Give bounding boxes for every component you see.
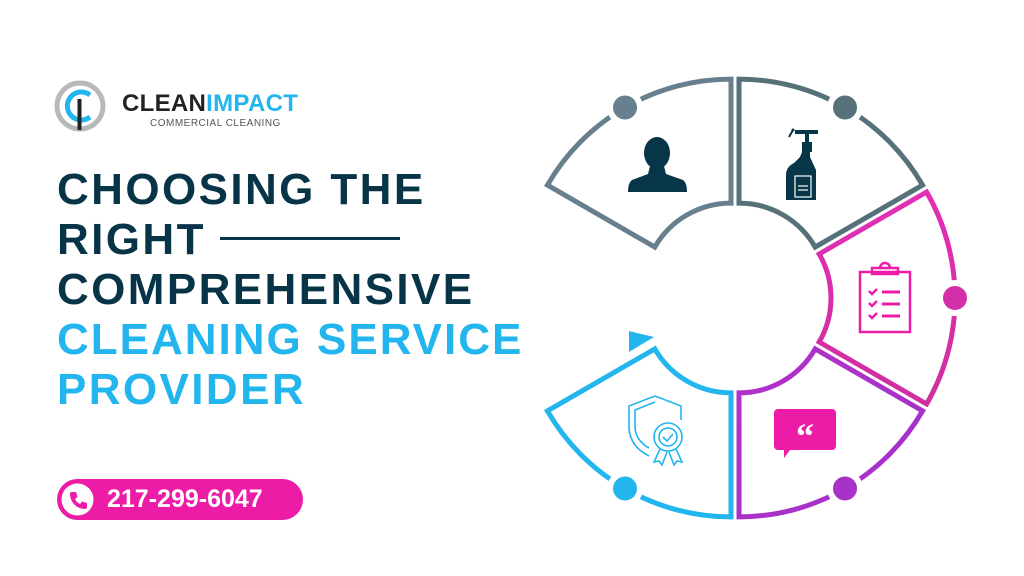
title (57, 165, 523, 414)
logo tagline: COMMERCIAL CLEANING (150, 118, 281, 129)
logo (54, 80, 298, 132)
arrow: blue triangle (629, 331, 654, 352)
title: CLEANING SERVICE (57, 315, 523, 364)
icon: quote bubble: “ (796, 416, 814, 456)
icon: phone (62, 484, 94, 516)
title: COMPREHENSIVE (57, 265, 474, 314)
icon: person (628, 137, 687, 192)
title: PROVIDER (57, 365, 306, 414)
segment: right (checklist) (819, 192, 970, 404)
segment: bottom-left (certificate shield) (547, 349, 731, 517)
title: RIGHT (57, 215, 206, 264)
segment: bottom-right (quote) (739, 349, 923, 517)
icon: clipboard (860, 263, 910, 332)
icon: shield badge (629, 396, 682, 465)
icon: quote bubble (774, 409, 836, 458)
segment: top-left (person) (547, 79, 731, 247)
segment: top-right (spray bottle) (739, 79, 923, 247)
title: CHOOSING THE (57, 165, 426, 214)
icon: spray bottle (786, 128, 818, 200)
phone pill (57, 479, 303, 520)
logo wordmark: CLEANIMPACT (122, 90, 298, 117)
icon: logo mark (54, 80, 106, 132)
phone number: 217-299-6047 (107, 485, 263, 513)
